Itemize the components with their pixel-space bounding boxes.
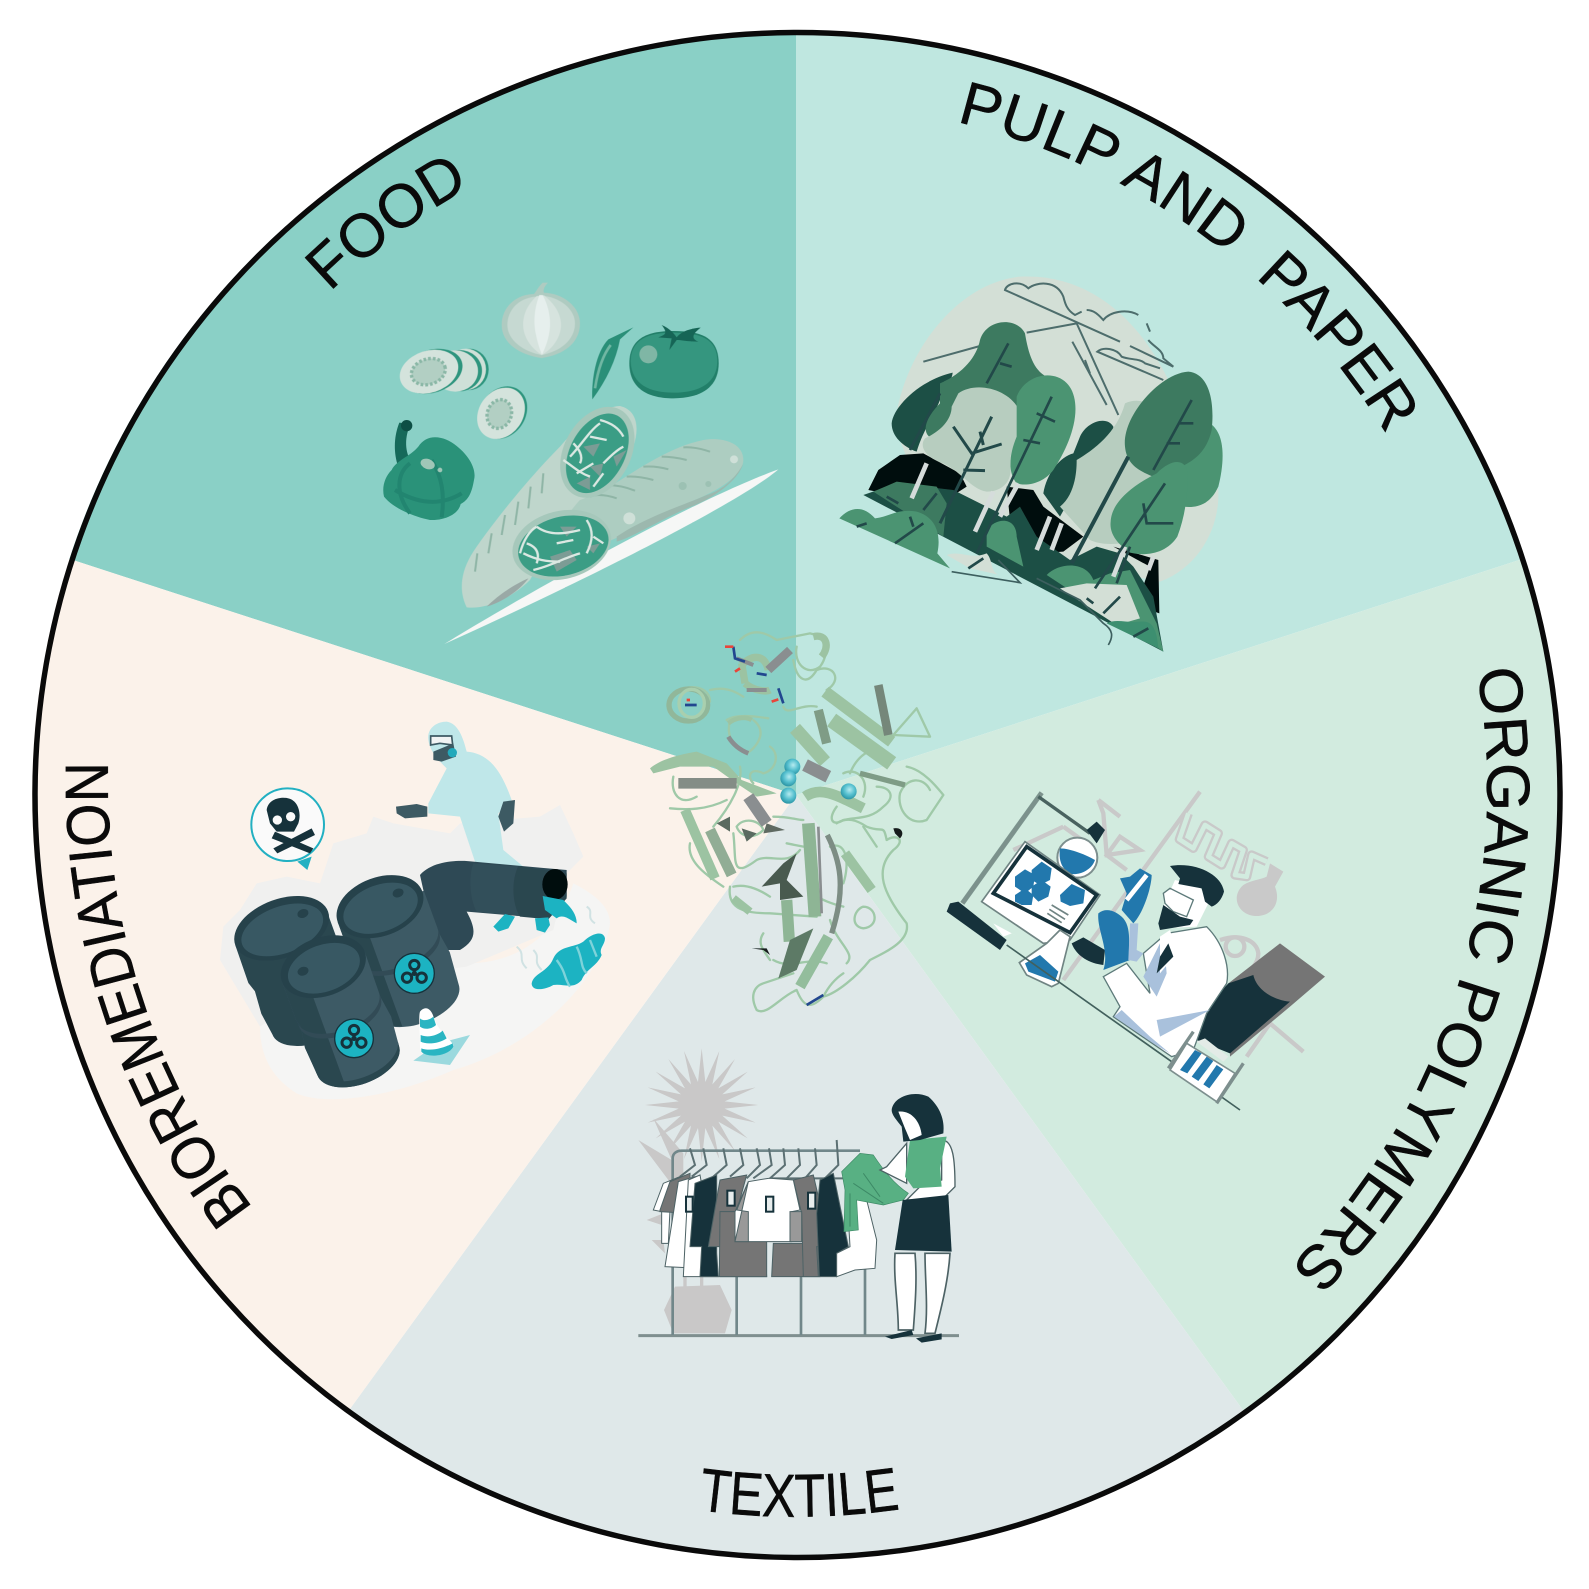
heading: textile: TEXTILE <box>703 1468 898 1518</box>
tree: small dark <box>1043 421 1113 517</box>
blue gloves <box>1098 868 1152 970</box>
heading: bioremediation: BIOREMEDIATION <box>66 766 250 1230</box>
keyboard / dark object <box>1072 937 1105 965</box>
icon: cucumber slice <box>467 377 537 449</box>
woman <box>880 1094 955 1343</box>
illustration: woman choosing clothes <box>638 1048 959 1343</box>
leak and drips <box>493 896 577 933</box>
icon: onion <box>502 283 580 358</box>
central protein structure <box>650 632 943 1011</box>
tree: green front right <box>1111 462 1188 554</box>
biohazard badge back <box>394 953 434 993</box>
skyline silhouette <box>220 805 583 1027</box>
pipette <box>1127 875 1147 900</box>
icon: bell pepper <box>383 420 475 520</box>
forest backdrop <box>895 276 1218 582</box>
round flask <box>1057 822 1105 878</box>
faded potted plant <box>638 1048 758 1333</box>
tree: dark green right <box>1125 372 1212 477</box>
ground vegetation dark <box>863 483 1163 652</box>
clouds and mountain lines <box>923 283 1173 415</box>
tree: dark left <box>892 373 953 452</box>
icon: wrap front <box>462 394 649 608</box>
heading: food: FOOD <box>304 159 461 289</box>
beta sheets <box>650 685 905 987</box>
tree trunks and branches <box>857 343 1193 637</box>
illustration: chemist <box>947 792 1325 1110</box>
conical flask <box>1019 930 1070 987</box>
price tags <box>686 1191 815 1212</box>
lab stand <box>947 793 1090 950</box>
garments <box>653 1173 877 1277</box>
protein loops <box>670 632 943 1011</box>
sector: food <box>69 31 796 795</box>
icon: plate <box>444 469 778 644</box>
panel: textile <box>350 796 1243 1555</box>
icon: wrap back <box>560 439 743 547</box>
heading: organic polymers: ORGANIC POLYMERS <box>1297 669 1530 1289</box>
coat shade <box>1114 937 1210 1053</box>
icon: chili <box>592 327 633 399</box>
icon: cucumber slices <box>394 341 489 401</box>
icon: tomato <box>629 325 719 398</box>
floor line <box>638 1331 959 1340</box>
tree: green back right <box>1180 423 1223 507</box>
pipe <box>420 861 568 950</box>
panel: pulp and paper <box>796 35 1520 795</box>
panel: food <box>70 35 796 794</box>
ground bushes <box>873 482 947 537</box>
ground outline <box>952 560 1112 645</box>
illustration: forest <box>839 276 1223 652</box>
monitor <box>982 842 1100 943</box>
metal ion spheres <box>780 759 857 804</box>
traffic cone <box>413 1008 470 1065</box>
sector: textile <box>347 795 1245 1559</box>
sector: pulp and paper <box>796 31 1523 795</box>
tree: mid dark <box>926 322 1047 440</box>
barrel: front <box>271 923 410 1099</box>
heading: pulp and paper: PULP AND PAPER <box>961 82 1415 432</box>
biohazard badge front <box>335 1019 373 1058</box>
panel: organic polymers <box>796 560 1558 1410</box>
background black undergrowth <box>868 453 1159 613</box>
sleeve <box>1128 923 1143 962</box>
illustration: toxic barrels <box>220 722 610 1099</box>
barrel: back right <box>328 862 469 1039</box>
faded lab glassware backdrop <box>1013 792 1303 1057</box>
tree: pale right <box>1060 401 1173 544</box>
panel: bioremediation <box>32 559 790 1409</box>
desk line <box>1007 945 1240 1110</box>
illustration: food ingredients and wraps <box>383 283 778 644</box>
puddle <box>532 934 605 989</box>
hazmat worker <box>396 722 523 867</box>
icon: skull and crossbones <box>267 798 315 853</box>
ground shape <box>260 883 610 1099</box>
fumes <box>517 907 595 970</box>
sector: organic polymers <box>796 559 1560 1413</box>
warning speech bubble <box>251 788 324 870</box>
chair leg and trouser <box>1197 975 1290 1053</box>
barrel: back left <box>225 884 369 1058</box>
head <box>1158 865 1224 930</box>
tree: pale center <box>923 387 1022 492</box>
ligand sticks <box>685 647 823 1005</box>
chair seat <box>1228 943 1325 1057</box>
protein helices <box>669 636 826 753</box>
shirt and tie <box>1160 930 1177 973</box>
scientist coat <box>1103 927 1227 1057</box>
clothes rack frame <box>673 1151 865 1335</box>
green shirt <box>842 1153 908 1232</box>
test tube rack <box>1168 1032 1243 1103</box>
sector: bioremediation <box>32 559 796 1413</box>
tree: green center <box>1010 375 1075 485</box>
hangers <box>680 1140 847 1178</box>
faded flask <box>1237 863 1283 916</box>
white and grey trunks <box>912 463 1153 577</box>
